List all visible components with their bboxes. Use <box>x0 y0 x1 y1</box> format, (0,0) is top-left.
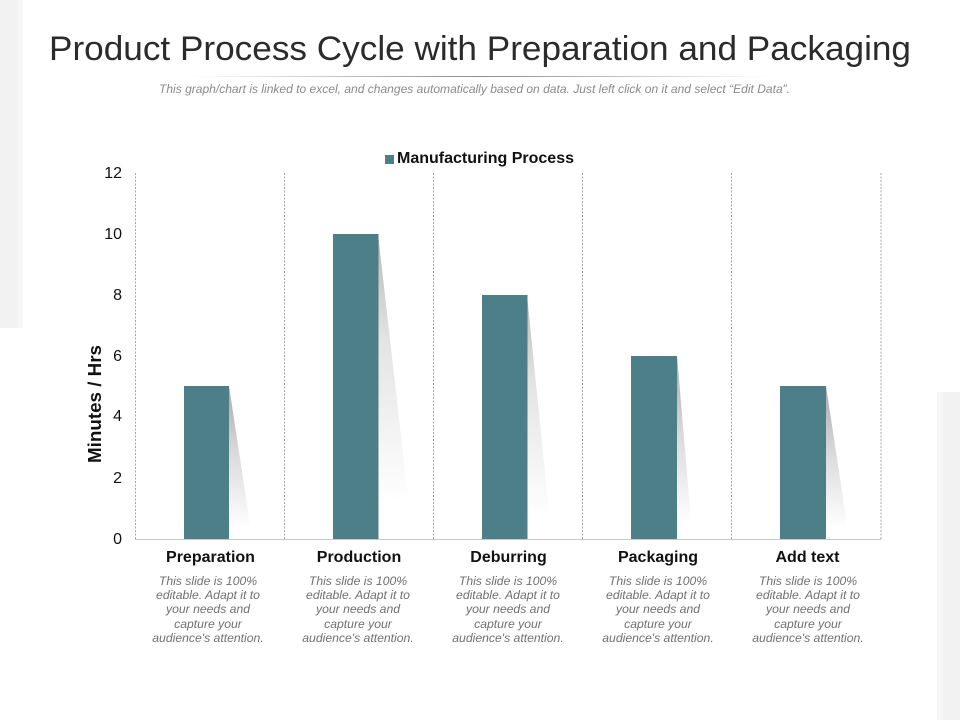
y axis labels: 6 <box>113 348 122 365</box>
category: preparation: capture your <box>174 617 243 631</box>
category: deburring: audience's attention. <box>452 631 564 645</box>
category: production: This slide is 100% <box>309 574 407 588</box>
bar shadow: preparation <box>229 386 250 528</box>
subtitle: This graph/chart is linked to excel, and changes automatically based on data. Just left click on it and select “Edit Data”. <box>159 84 790 96</box>
category: preparation: Preparation <box>166 549 255 566</box>
bar: preparation <box>184 386 229 539</box>
category: add text <box>752 549 864 645</box>
category: deburring: This slide is 100% <box>459 574 557 588</box>
left side panel <box>0 0 23 328</box>
category: production: audience's attention. <box>302 631 414 645</box>
bar: deburring <box>482 295 528 539</box>
y axis labels: 4 <box>113 408 122 425</box>
category: deburring: editable. Adapt it to <box>456 588 560 602</box>
category: packaging: audience's attention. <box>602 631 714 645</box>
y axis labels <box>104 165 122 548</box>
category: packaging <box>602 549 714 645</box>
bar: add text <box>780 386 826 539</box>
legend: Manufacturing Process <box>397 150 574 167</box>
category: production: capture your <box>324 617 393 631</box>
category: add text: audience's attention. <box>752 631 864 645</box>
category: production: Production <box>317 549 401 566</box>
category: preparation: your needs and <box>165 602 251 616</box>
subtitle divider <box>190 76 770 77</box>
category: add text: capture your <box>774 617 843 631</box>
category: add text: editable. Adapt it to <box>756 588 860 602</box>
bar: production <box>333 234 378 539</box>
bar: packaging <box>631 356 677 539</box>
category: packaging: editable. Adapt it to <box>606 588 710 602</box>
category: preparation: audience's attention. <box>152 631 264 645</box>
category: add text: This slide is 100% <box>759 574 857 588</box>
y axis title: Minutes / Hrs <box>85 345 105 463</box>
category: add text: Add text <box>776 549 840 566</box>
y axis labels: 0 <box>113 531 122 548</box>
category: preparation <box>152 549 264 645</box>
y axis labels: 12 <box>104 165 122 182</box>
bar shadow: packaging <box>677 356 691 524</box>
y axis labels: 10 <box>104 226 122 243</box>
category: production <box>302 549 414 645</box>
bar shadow: deburring <box>527 295 549 516</box>
category: deburring: Deburring <box>470 549 547 566</box>
category: packaging: capture your <box>624 617 693 631</box>
category: packaging: Packaging <box>618 549 698 566</box>
category: production: your needs and <box>315 602 401 616</box>
bar shadow: add text <box>826 386 847 528</box>
category: preparation: This slide is 100% <box>159 574 257 588</box>
y axis labels: 2 <box>113 470 122 487</box>
right side panel <box>937 392 960 720</box>
bar shadow: production <box>378 234 408 503</box>
category: production: editable. Adapt it to <box>306 588 410 602</box>
category: add text: your needs and <box>765 602 851 616</box>
title: Product Process Cycle with Preparation and Packaging <box>49 30 911 68</box>
y axis labels: 8 <box>113 287 122 304</box>
category: preparation: editable. Adapt it to <box>156 588 260 602</box>
bar chart <box>135 173 881 540</box>
category: deburring: capture your <box>474 617 543 631</box>
category: deburring <box>452 549 564 645</box>
category: packaging: your needs and <box>615 602 701 616</box>
category: deburring: your needs and <box>465 602 551 616</box>
category: packaging: This slide is 100% <box>609 574 707 588</box>
